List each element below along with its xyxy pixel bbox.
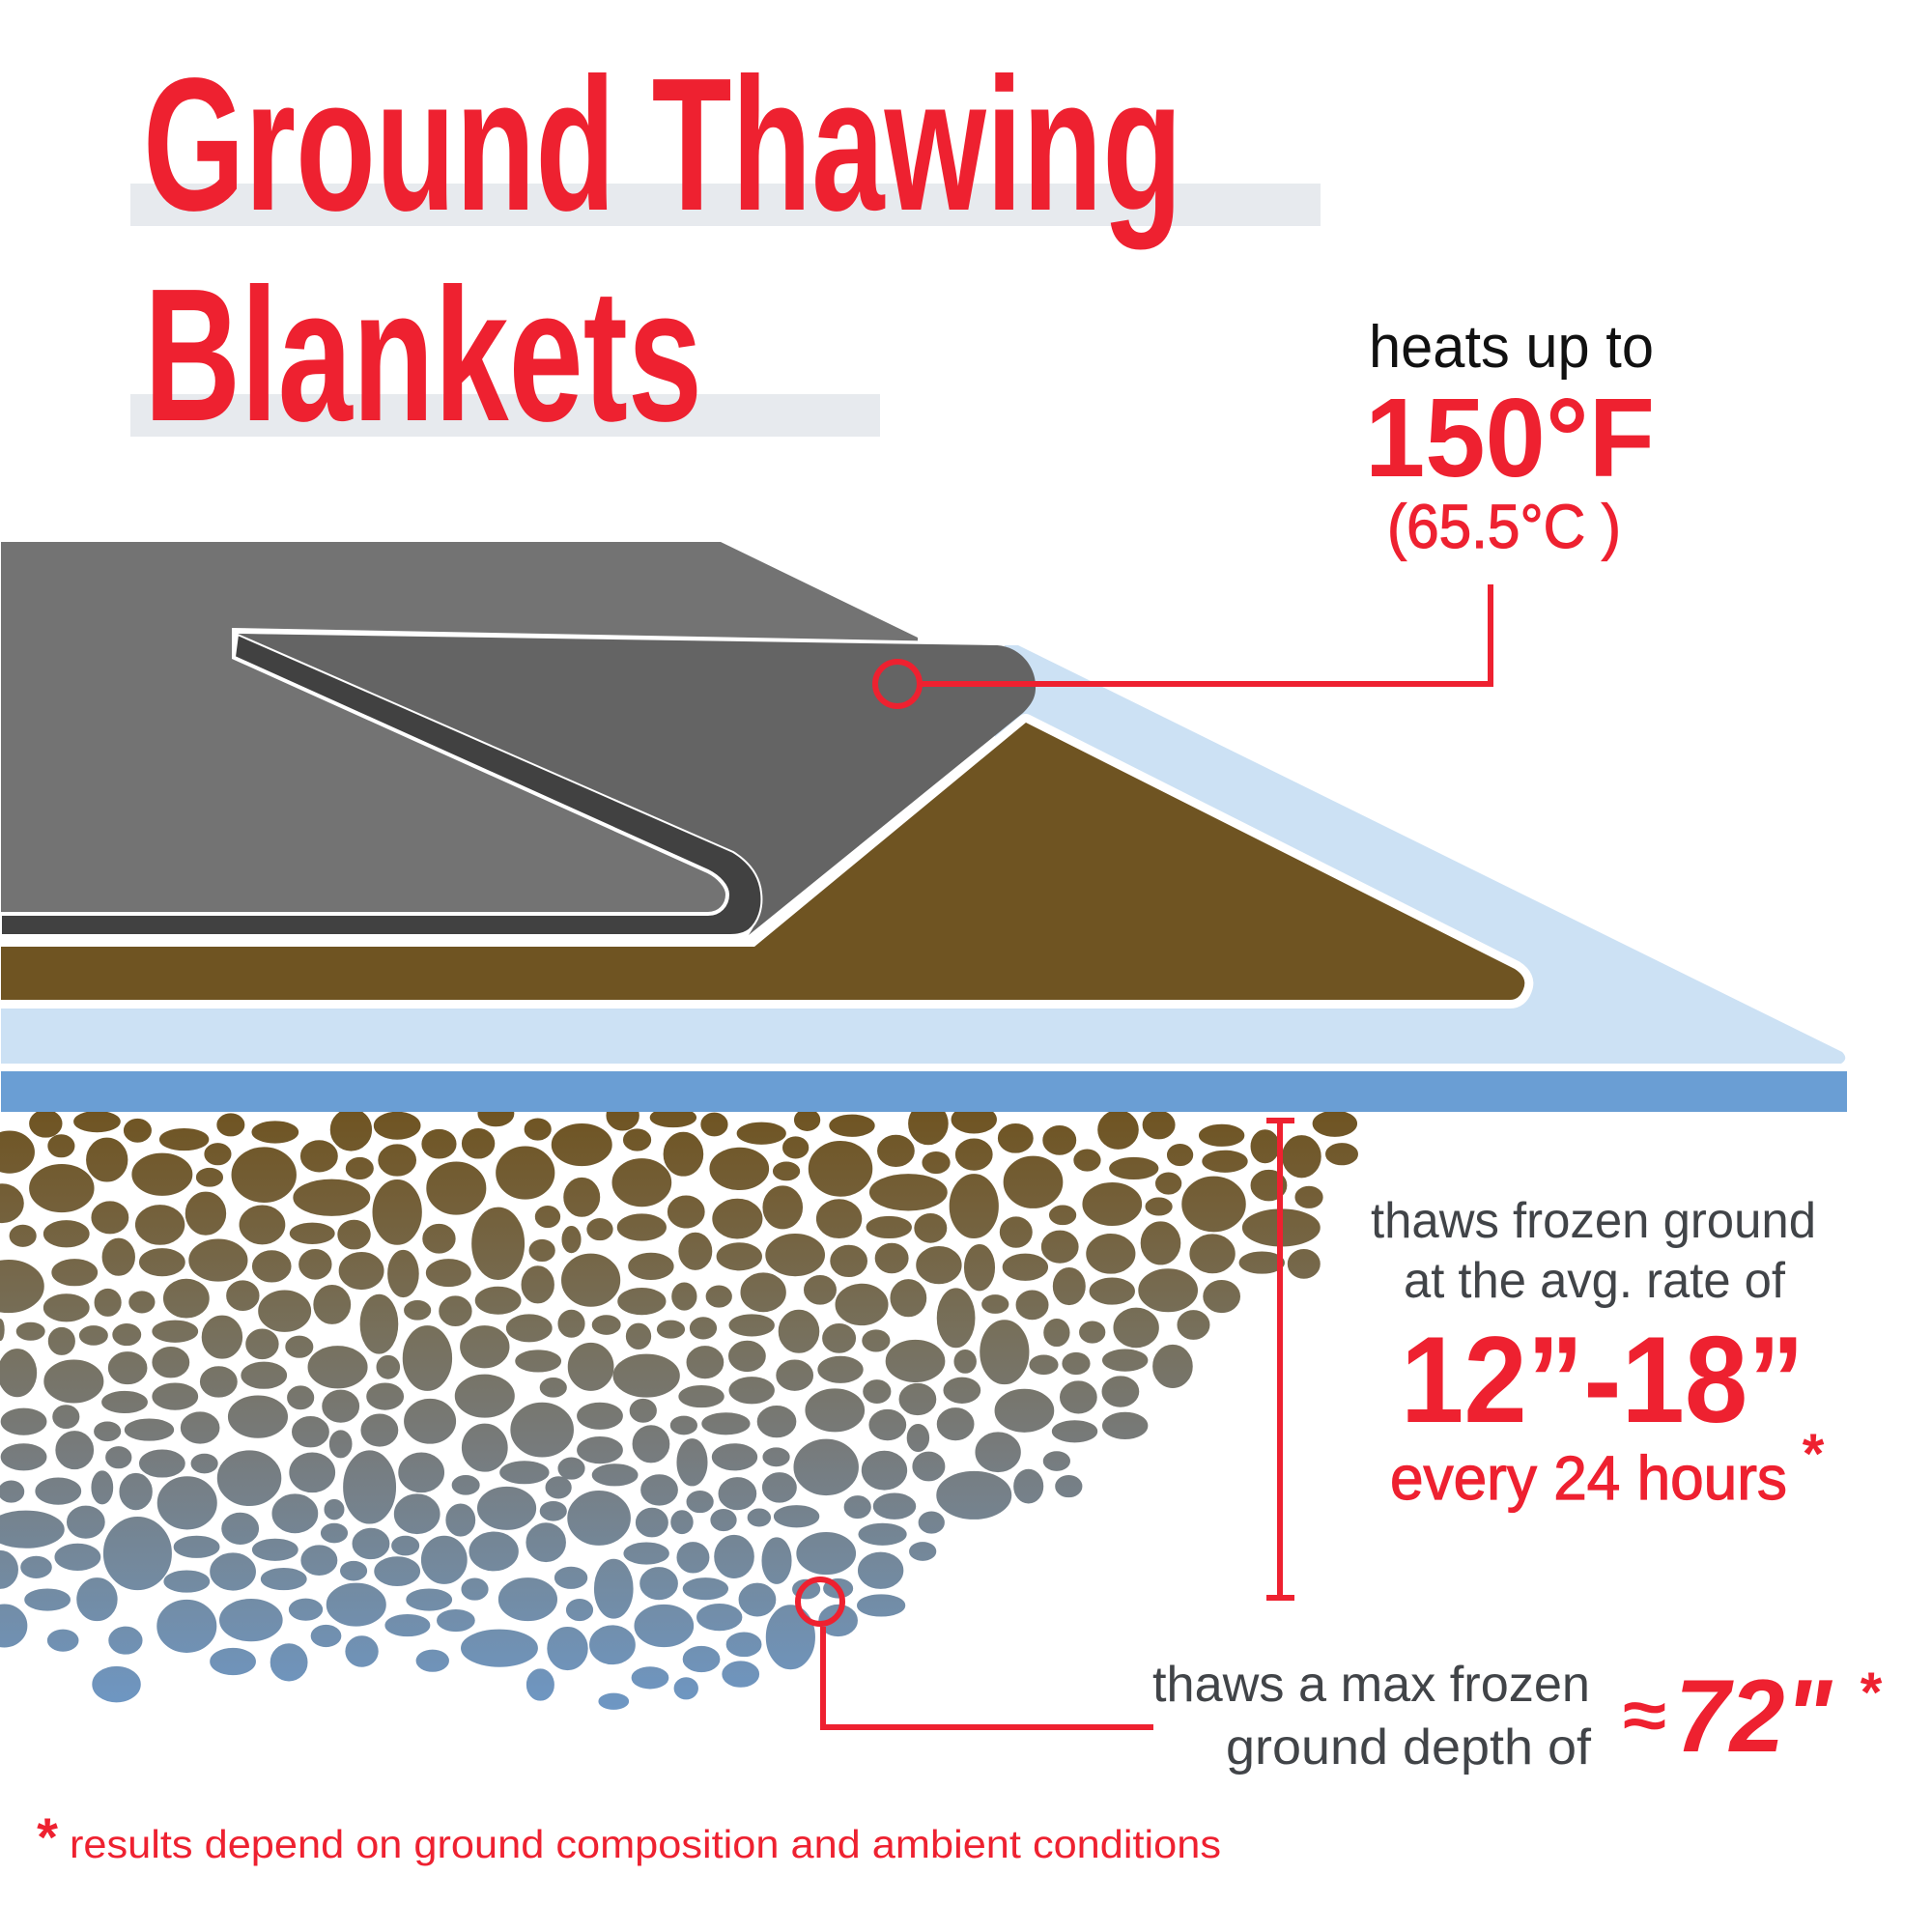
blanket fold top <box>238 634 1036 935</box>
thaw rate text: 12”-18” <box>1401 1311 1804 1448</box>
snow layer <box>1 645 1845 1064</box>
ice layer cover over pebble tops <box>1 1071 1847 1112</box>
pebbles: frozen ground <box>0 1101 1357 1709</box>
ice layer <box>1 1071 1847 1112</box>
thaw rate text: thaws frozen ground <box>1371 1193 1816 1249</box>
panel: blanket and ground cross-section <box>1 542 1847 1112</box>
blanket back panel <box>1 542 918 915</box>
thaw rate text: * <box>1803 1423 1825 1486</box>
heat callout text: 150°F <box>1365 375 1655 500</box>
thaw rate text: at the avg. rate of <box>1404 1253 1786 1309</box>
heat callout text: (65.5°C ) <box>1387 492 1621 561</box>
blanket outline <box>1 631 1005 915</box>
title: Ground Thawing <box>143 39 1182 250</box>
max depth text: ground depth of <box>1226 1719 1592 1776</box>
max depth text <box>1152 1657 1883 1776</box>
footnote: results depend on ground composition and ambient conditions <box>70 1822 1221 1866</box>
title: Blankets <box>144 249 702 461</box>
thaw rate text: every 24 hours <box>1390 1443 1787 1513</box>
heat callout leader <box>875 584 1491 706</box>
blanket edge strip <box>1 635 761 935</box>
title <box>130 39 1321 461</box>
max depth text: ≈ <box>1623 1677 1666 1754</box>
heat callout text <box>1365 314 1655 561</box>
thawed soil <box>1 723 1524 1000</box>
max depth text: 72" <box>1675 1658 1833 1774</box>
thaw rate text <box>1371 1193 1825 1513</box>
depth measure bar <box>1266 1121 1294 1598</box>
max depth leader <box>798 1579 1153 1727</box>
footnote: * <box>37 1806 58 1867</box>
max depth text: * <box>1861 1662 1883 1724</box>
heat callout text: heats up to <box>1369 314 1654 381</box>
max depth text: thaws a max frozen <box>1152 1657 1590 1713</box>
footnote <box>37 1806 1221 1867</box>
